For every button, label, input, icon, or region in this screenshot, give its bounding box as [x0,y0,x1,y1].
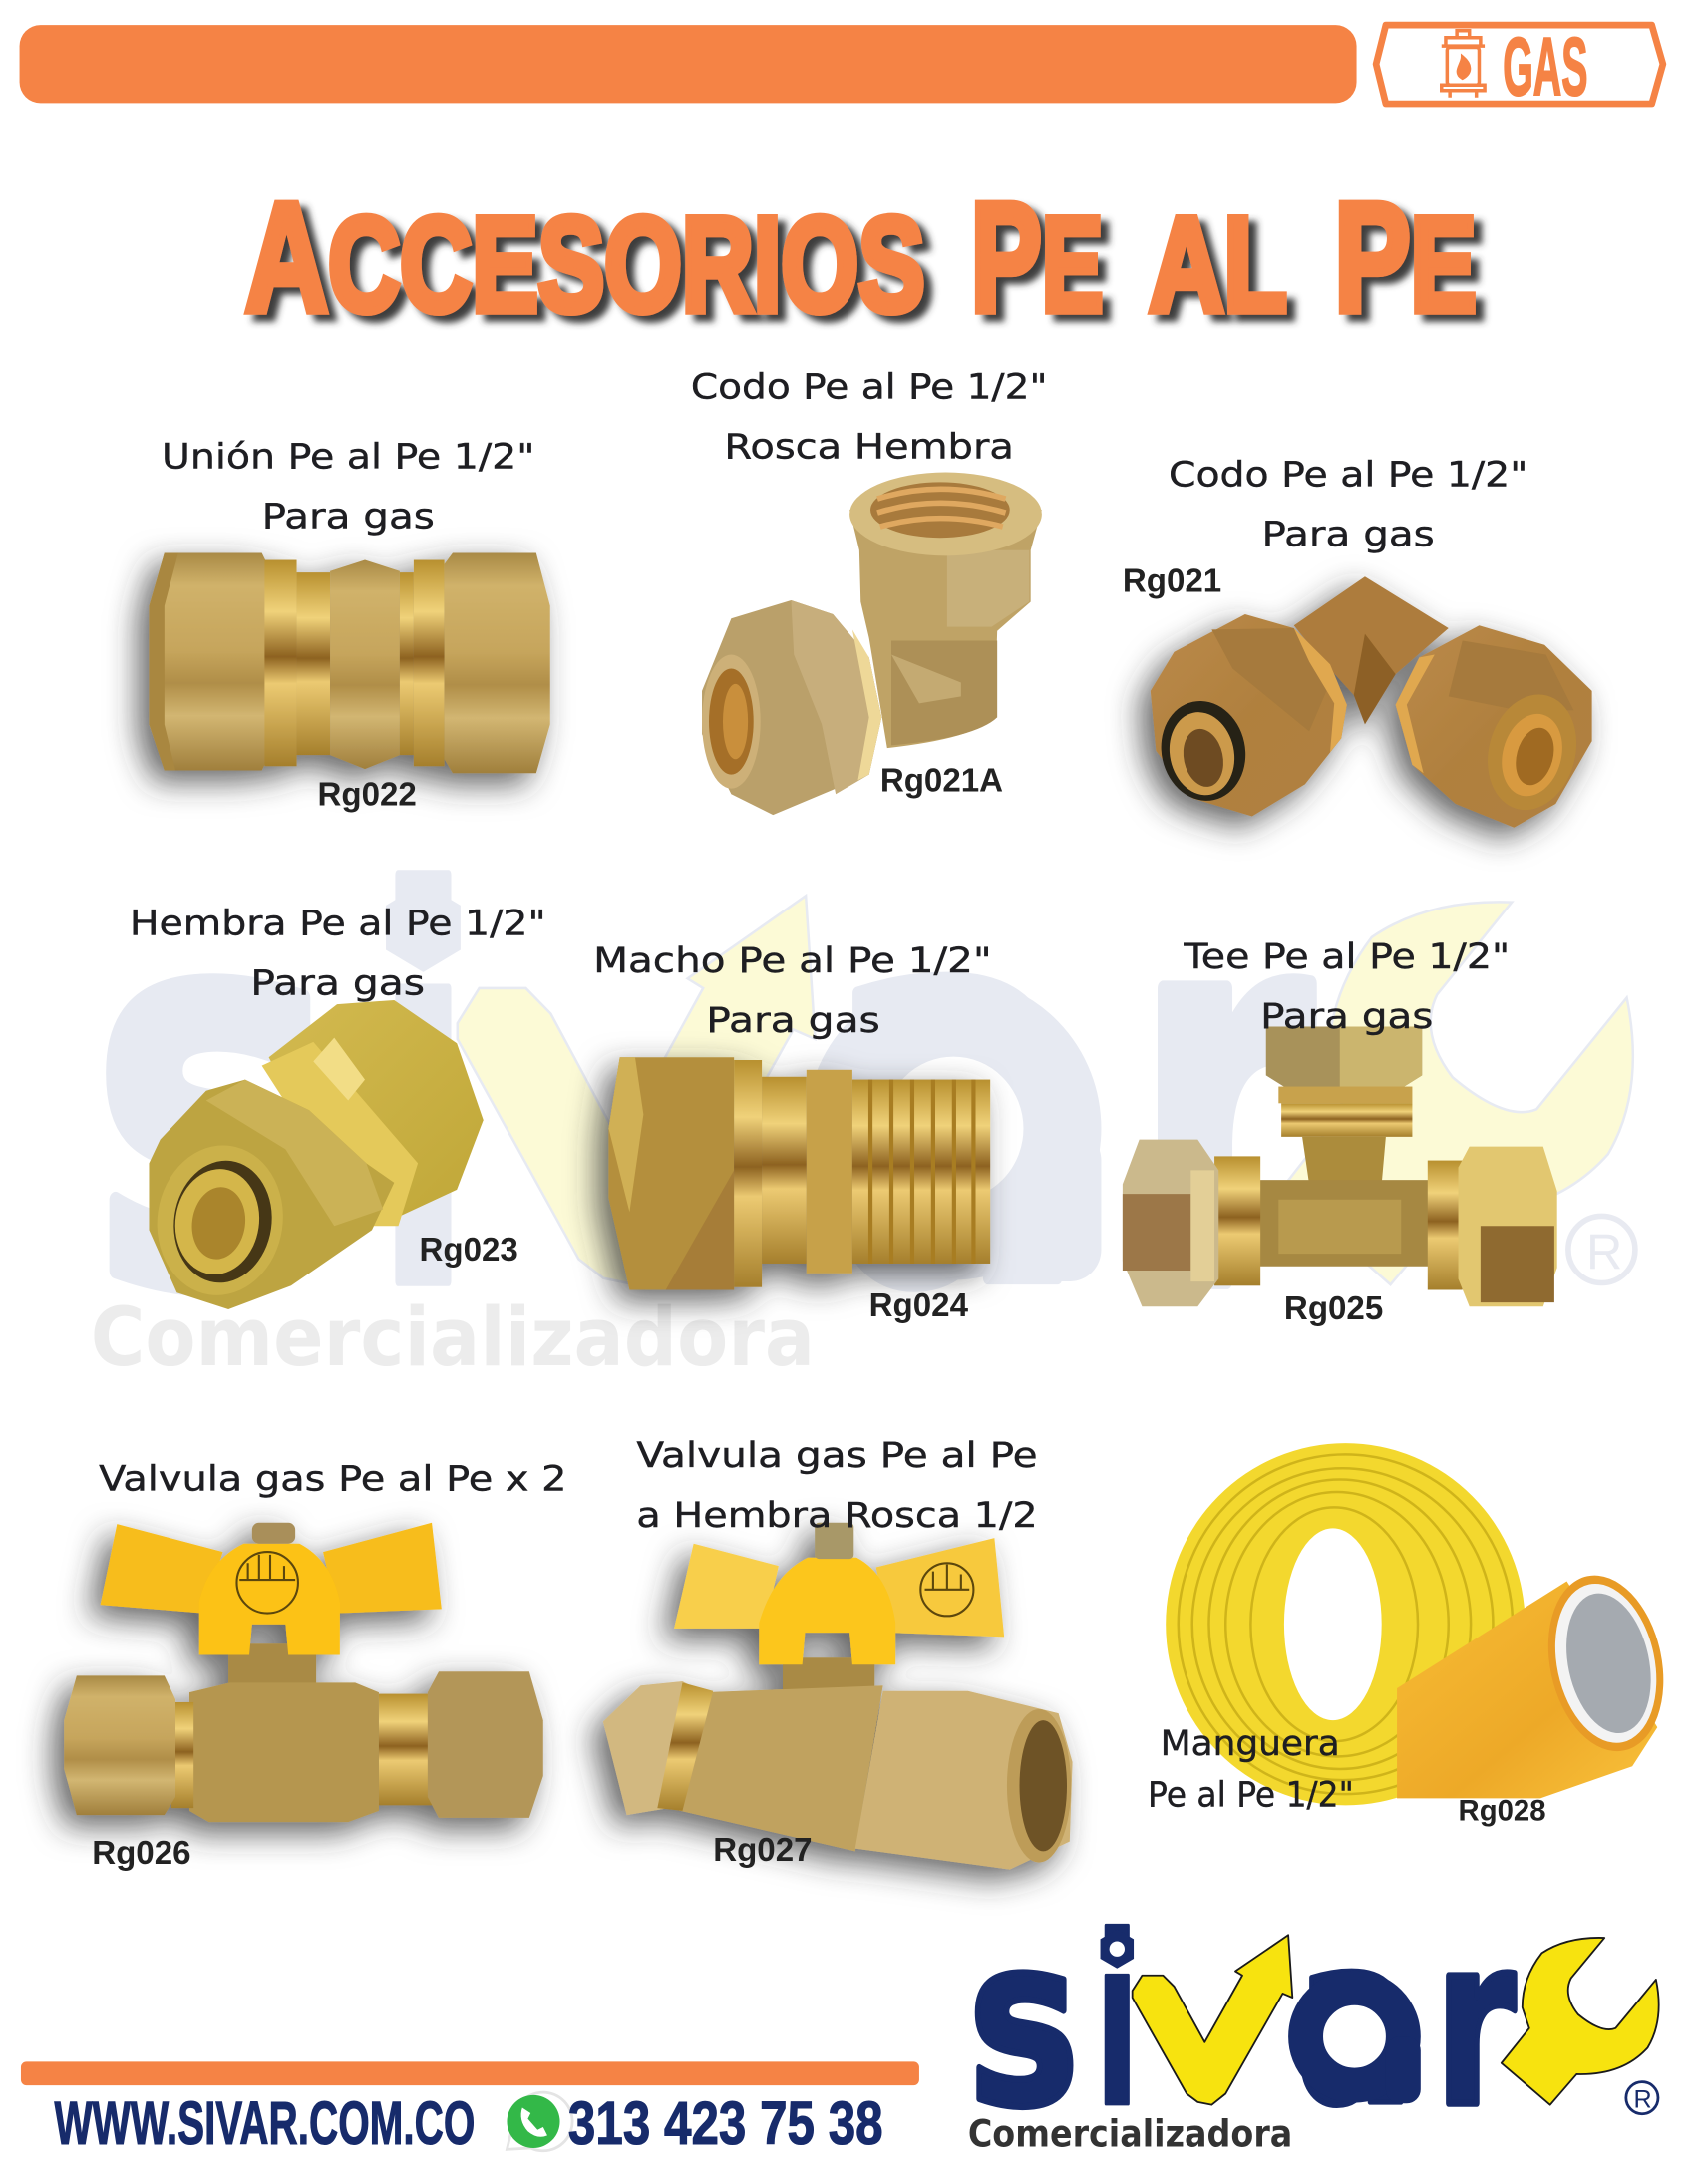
website: WWW.SIVAR.COM.CO [54,2089,475,2158]
panel: male Rg024 [593,941,992,1324]
code: Rg026 [92,1835,191,1872]
code: Rg021 [1123,563,1221,600]
logo wordmark: s [968,1887,1080,2159]
background watermark: a [822,783,1089,1405]
hose coil image [1166,1443,1526,1805]
heading [691,368,1047,468]
gas badge: GAS [1503,21,1587,113]
fitting image: union [149,553,550,773]
heading: Codo Pe al Pe 1/2" [691,368,1047,408]
code: Rg023 [419,1232,518,1269]
background watermark: i [374,786,473,1408]
header bar [20,25,1357,103]
logo wordmark [968,1886,1516,2159]
panel: valve Rg026 [64,1460,567,1872]
heading [1148,1724,1354,1816]
heading: Valvula gas Pe al Pe [636,1436,1038,1476]
panel: valve Rg027 [603,1436,1073,1870]
panel: tee Rg025 [1123,937,1557,1327]
heading [636,1436,1038,1536]
heading [593,941,992,1041]
logo subtitle: Comercializadora [968,2112,1292,2156]
title: ACCESORIOS [245,172,925,344]
heading [162,437,534,537]
cut pipe image [1397,1565,1679,1798]
heading: Valvula gas Pe al Pe x 2 [99,1460,567,1500]
registered mark [1626,2082,1658,2114]
registered mark: R [1634,2085,1652,2113]
background watermark: r [1133,786,1315,1408]
panel: female Rg023 [130,904,546,1309]
title: PE [971,172,1103,344]
code: Rg025 [1284,1290,1383,1327]
icon: gas stove [1442,31,1485,98]
fitting image: copper elbow [1151,576,1592,828]
logo wordmark: i [1095,1887,1140,2159]
background watermark [91,783,1635,1408]
fitting image: butterfly valve female [603,1523,1073,1870]
heading: Para gas [706,1001,880,1041]
heading: Unión Pe al Pe 1/2" [162,437,534,477]
logo [968,1886,1659,2159]
heading [130,904,546,1003]
fitting image: butterfly valve double [64,1523,543,1822]
background watermark: R [1586,1224,1622,1280]
title: AL [1149,191,1287,340]
heading: Manguera [1161,1724,1340,1764]
icon: whatsapp [507,2092,572,2151]
fitting image: tee [1123,1026,1557,1306]
heading: Para gas [1262,516,1435,555]
heading [1183,937,1510,1037]
heading [1169,456,1527,555]
phone: 313 423 75 38 [568,2089,883,2158]
fitting image: female connector [148,1000,484,1309]
code: Rg022 [317,776,417,813]
heading: a Hembra Rosca 1/2 [636,1496,1038,1536]
code: Rg021A [880,762,1003,799]
background watermark: s [91,786,339,1408]
background watermark: Comercializadora [91,1291,815,1385]
icon: wrench [1502,1938,1659,2105]
heading: Para gas [1260,997,1433,1037]
code: Rg024 [869,1287,969,1324]
code: Rg028 [1459,1795,1546,1828]
footer bar [21,2061,919,2085]
panel: elbow female thread Rg021A [691,368,1047,815]
heading: Pe al Pe 1/2" [1148,1776,1354,1816]
heading: Para gas [250,963,425,1003]
heading: Hembra Pe al Pe 1/2" [130,904,546,943]
heading: Macho Pe al Pe 1/2" [593,941,992,981]
heading: Rosca Hembra [724,428,1014,468]
panel: hose Rg028 [1148,1443,1679,1828]
heading: Tee Pe al Pe 1/2" [1183,937,1510,977]
gas badge [1376,21,1663,113]
code: Rg027 [713,1832,813,1869]
panel: union Rg022 [149,437,550,813]
title: PE [1334,172,1477,344]
logo wordmark: a [1295,1886,1415,2158]
fitting image: male connector [608,1057,990,1289]
fitting image: threaded elbow [702,473,1042,815]
heading: Para gas [262,497,435,537]
logo wordmark: r [1435,1887,1516,2159]
panel: elbow Rg021 [1123,456,1592,828]
heading: Codo Pe al Pe 1/2" [1169,456,1527,496]
